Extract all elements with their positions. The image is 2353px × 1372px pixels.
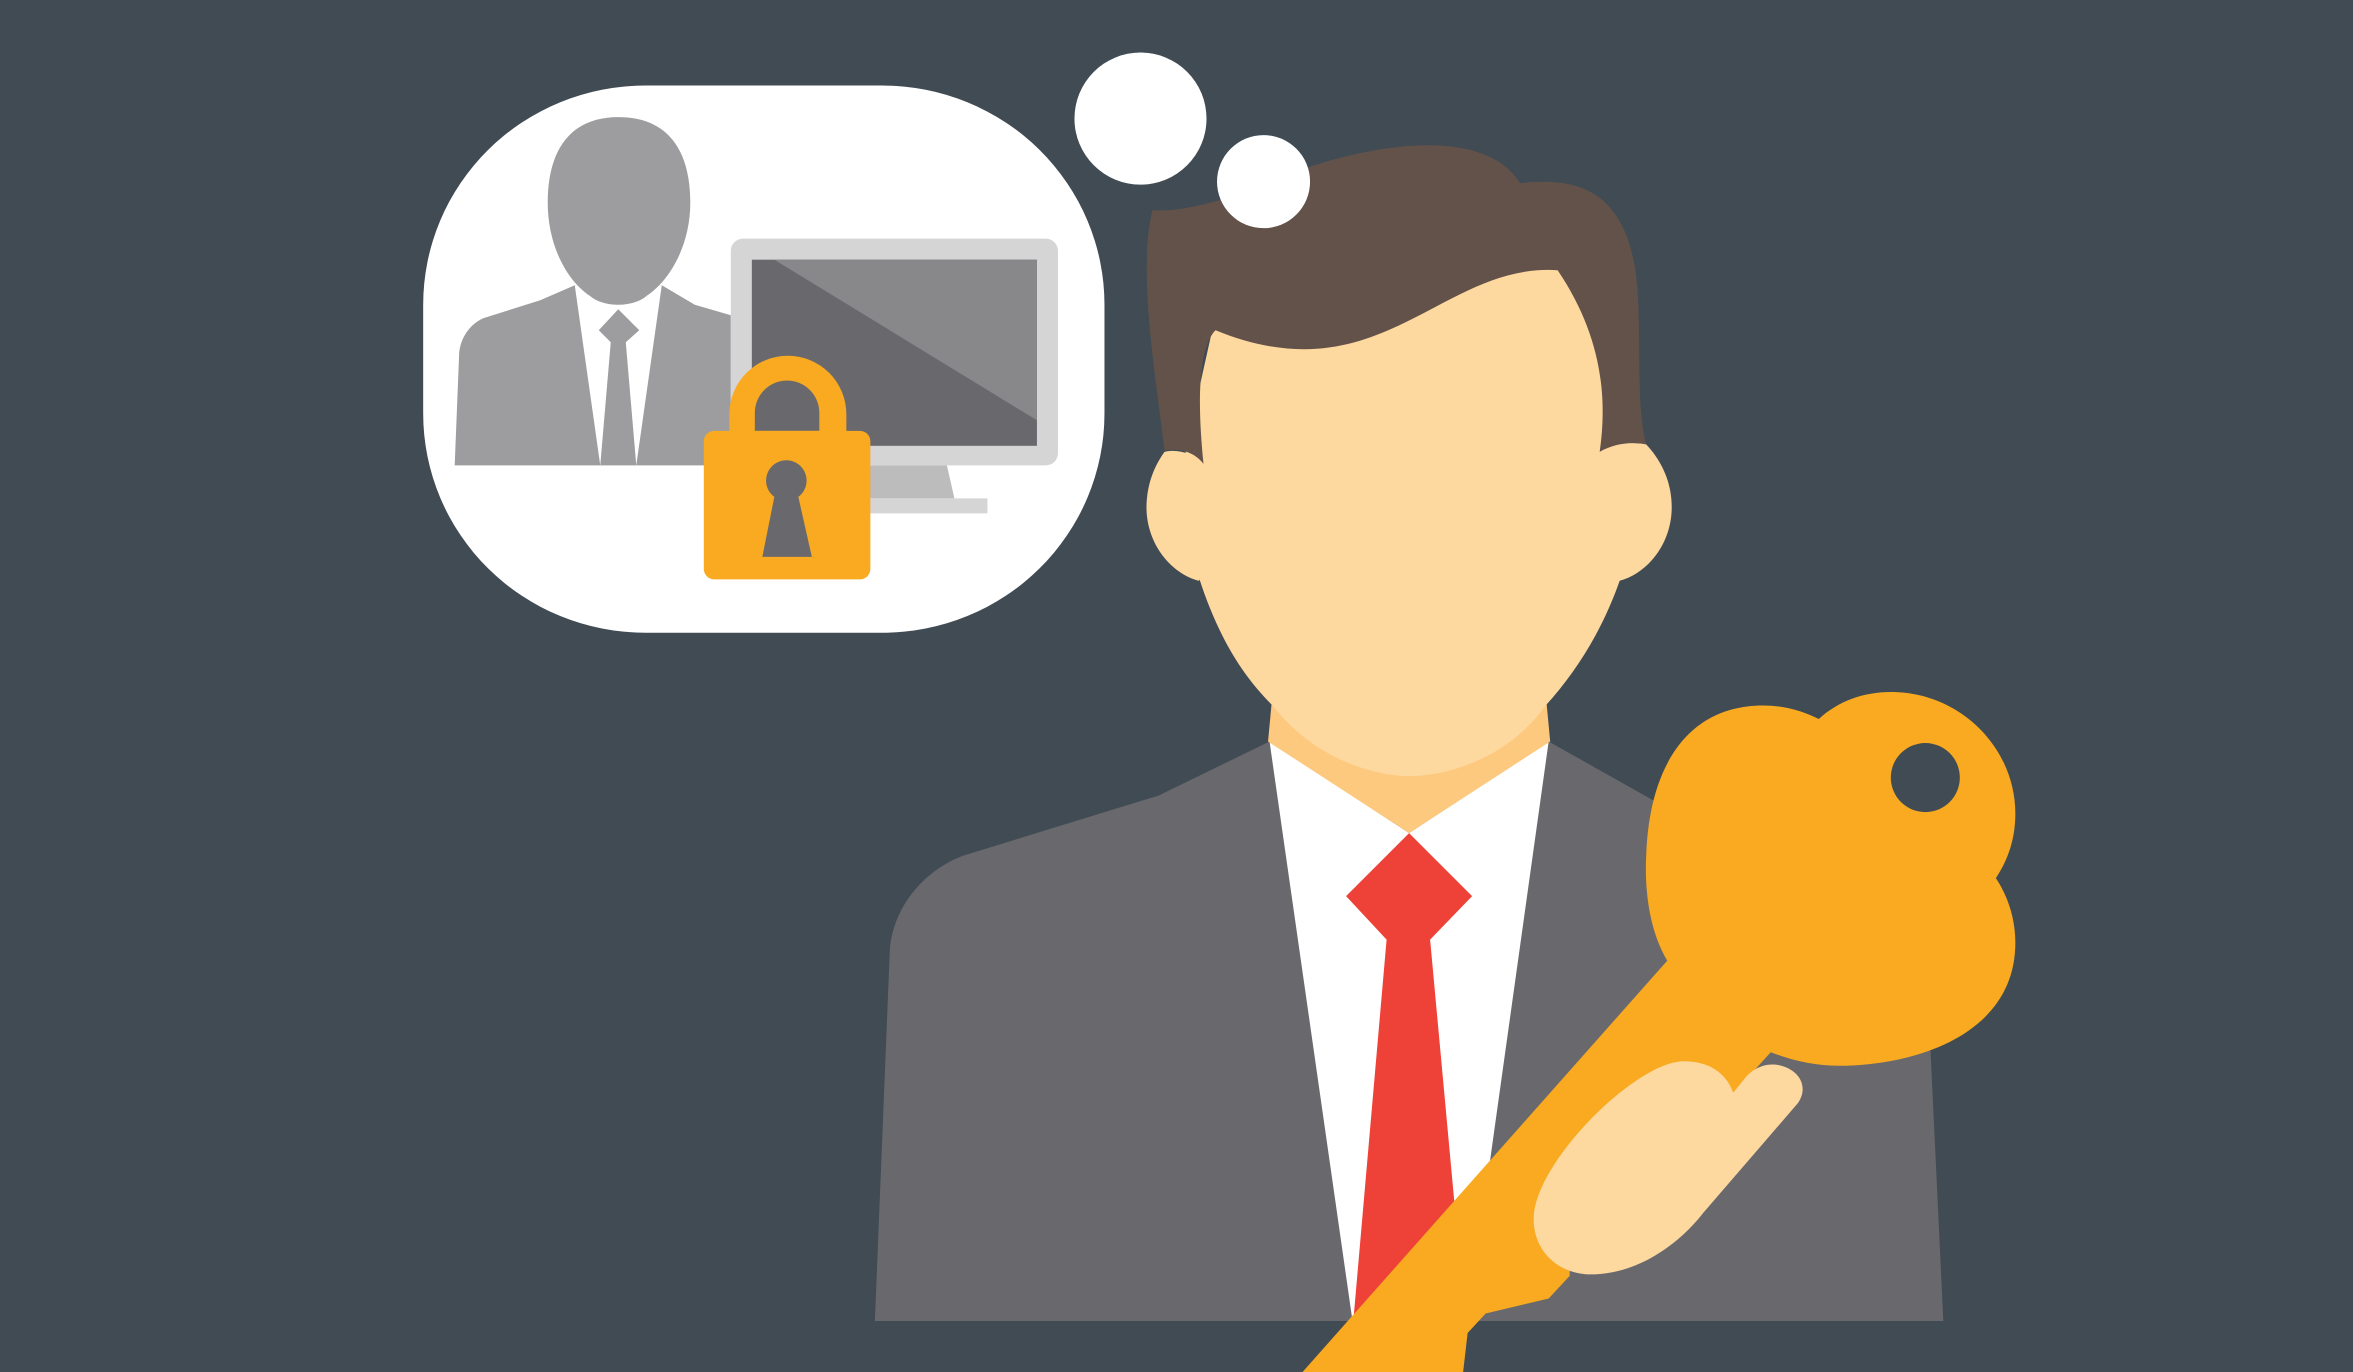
face: [1186, 255, 1639, 776]
monitor screen: [752, 260, 1037, 446]
grey figure head: [548, 117, 690, 305]
monitor stand: [863, 465, 954, 498]
figure: businessman: [875, 145, 1943, 1321]
right ear: [1591, 443, 1672, 581]
icon: hand holding key: [1534, 1061, 1803, 1274]
key shape: [1303, 692, 2015, 1372]
grey figure shirt: [575, 285, 662, 465]
monitor base: [863, 498, 987, 513]
grey figure tie: [599, 309, 639, 465]
neck: [1268, 694, 1550, 833]
icon: large golden key: [1303, 692, 2015, 1372]
thought bubble body: [423, 86, 1104, 633]
small thought circle: [1217, 135, 1310, 228]
grey suit: [455, 285, 731, 465]
icon: padlock: [704, 356, 870, 579]
keyhole: [762, 460, 812, 557]
necktie: [1346, 833, 1472, 1318]
shackle opening: [755, 381, 819, 431]
key hole: [1891, 743, 1960, 812]
screen glare: [774, 260, 1037, 420]
suit jacket: [875, 742, 1943, 1321]
monitor frame: [731, 239, 1058, 465]
icon: grey businessman: [455, 117, 731, 465]
left ear: [1146, 451, 1223, 581]
shirt: [1270, 742, 1549, 1318]
hair: [1147, 145, 1646, 464]
large thought circle: [1074, 53, 1207, 185]
padlock shackle: [729, 356, 846, 435]
panel: thought bubble: [423, 53, 1207, 633]
padlock body: [704, 431, 870, 579]
icon: computer monitor: [731, 239, 1058, 513]
